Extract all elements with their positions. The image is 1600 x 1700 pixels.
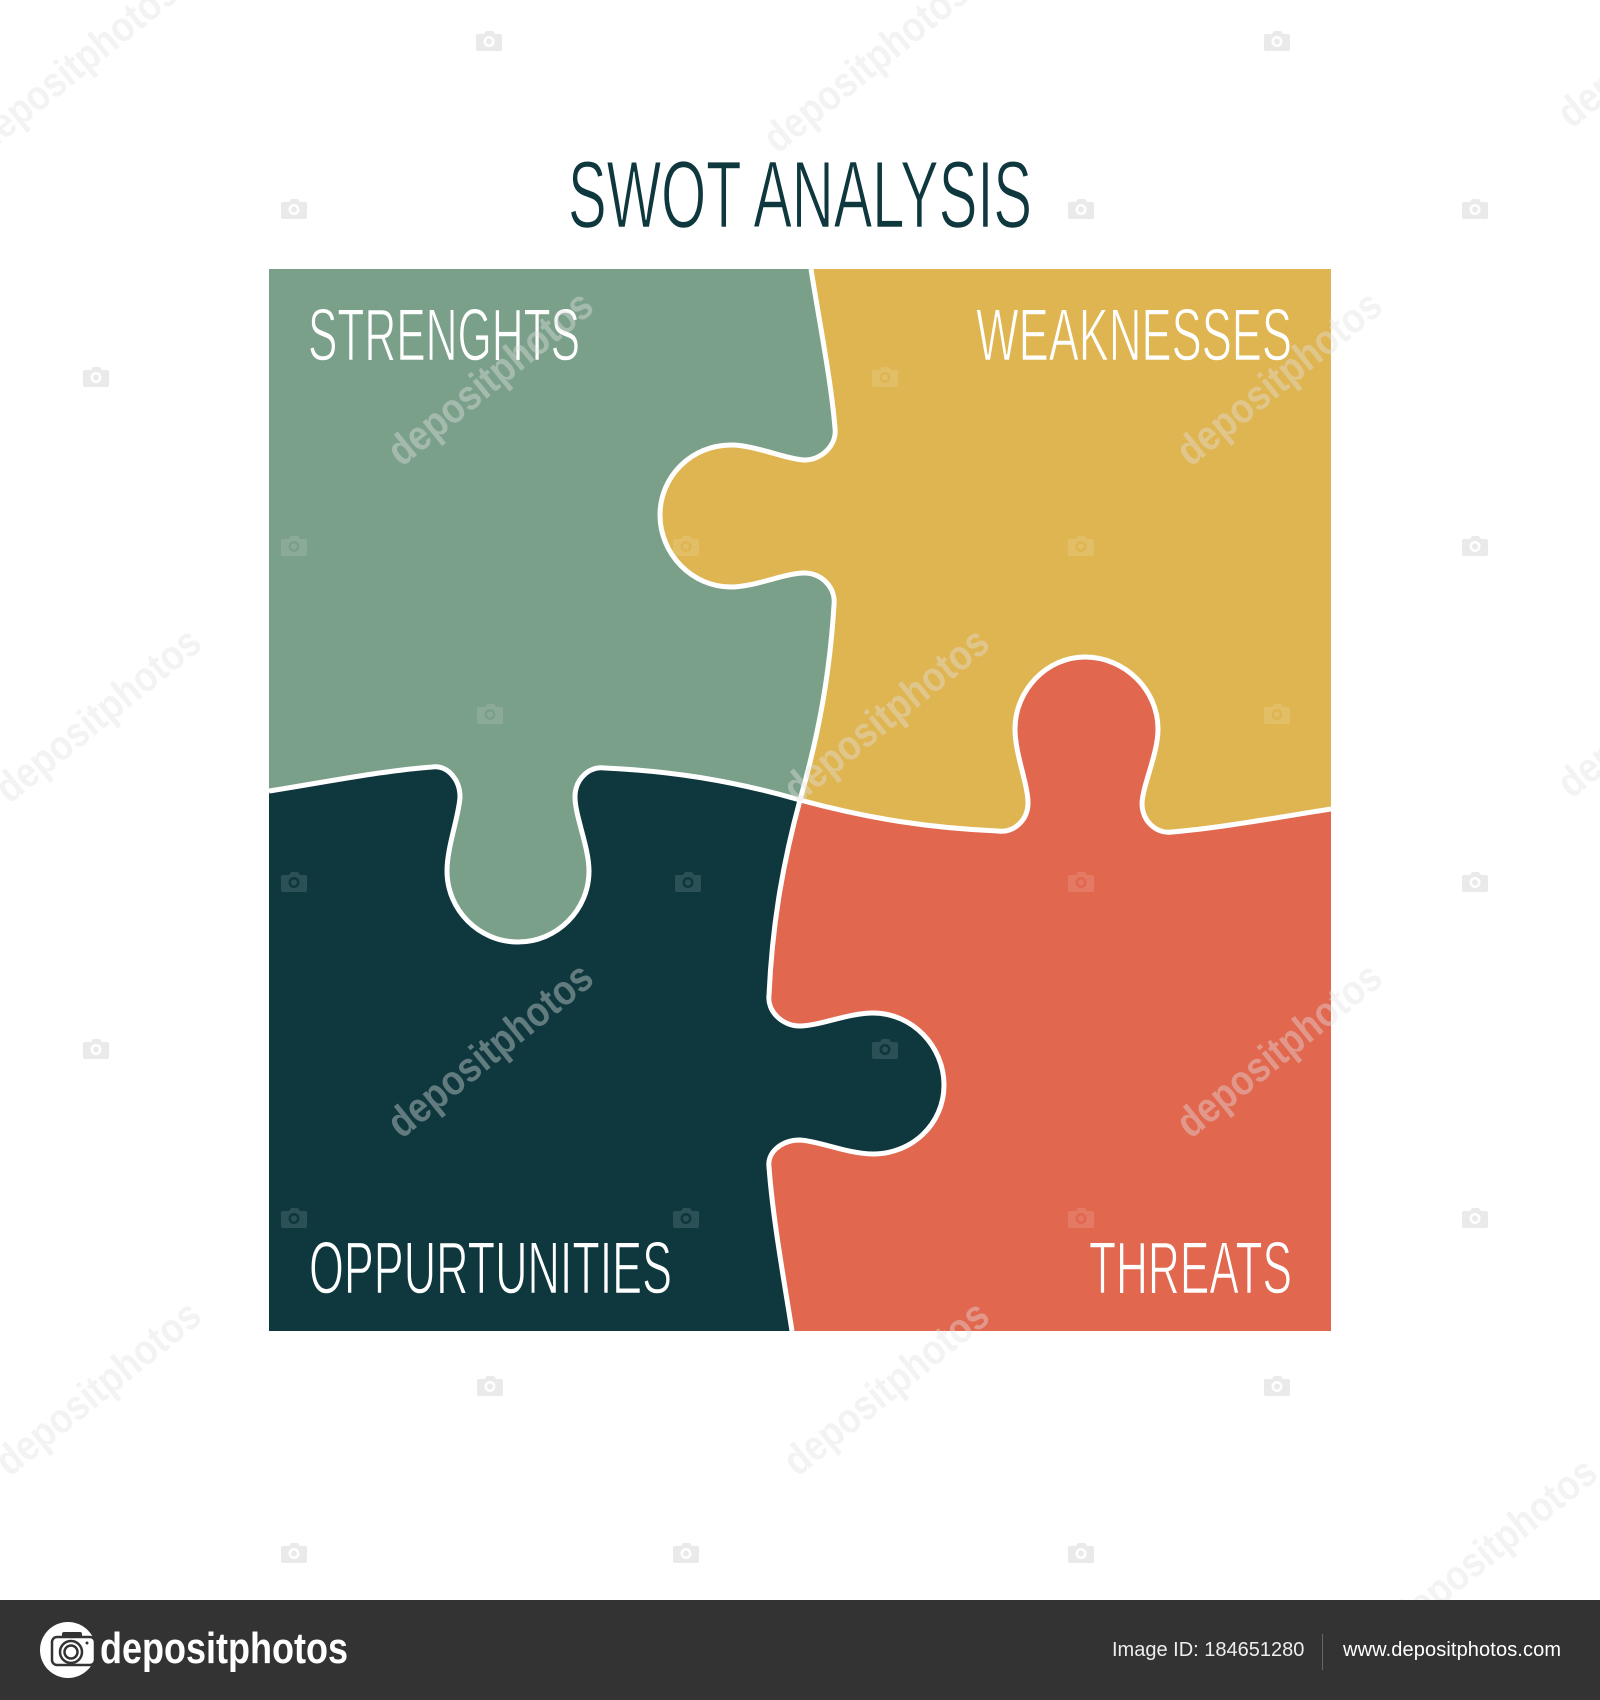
watermark text overlay: depositphotos [1167,281,1391,475]
label: threats: THREATS [1089,1226,1292,1310]
watermark text overlay: depositphotos [774,618,998,812]
watermark text overlay: depositphotos [1167,953,1391,1147]
logo wordmark: depositphotos [100,1624,348,1673]
panel: strengths puzzle piece [269,269,835,942]
label: weaknesses: WEAKNESSES [976,294,1292,376]
watermark camera icons on puzzle panels [281,367,1290,1228]
white seams between pieces [269,269,1331,1331]
puzzle SWOT matrix [269,269,1331,1331]
watermark text overlay: depositphotos [378,281,602,475]
footer bar [0,1600,1600,1700]
watermark camera icons on white background [83,31,1488,1563]
panel: threats puzzle piece [769,657,1331,1331]
panel: weaknesses puzzle piece [660,269,1331,832]
label: strenghts: STRENGHTS [308,294,580,376]
watermark text overlay: depositphotos [378,953,602,1147]
title: SWOT ANALYSIS [568,142,1032,248]
website url: www.depositphotos.com [1342,1639,1561,1661]
image id: Image ID: 184651280 [1112,1639,1304,1661]
watermark text overlay: depositphotos [774,1291,998,1485]
icon: depositphotos camera logo [40,1622,96,1678]
label: oppurtunities: OPPURTUNITIES [309,1226,672,1310]
panel: opportunities puzzle piece [269,767,944,1331]
